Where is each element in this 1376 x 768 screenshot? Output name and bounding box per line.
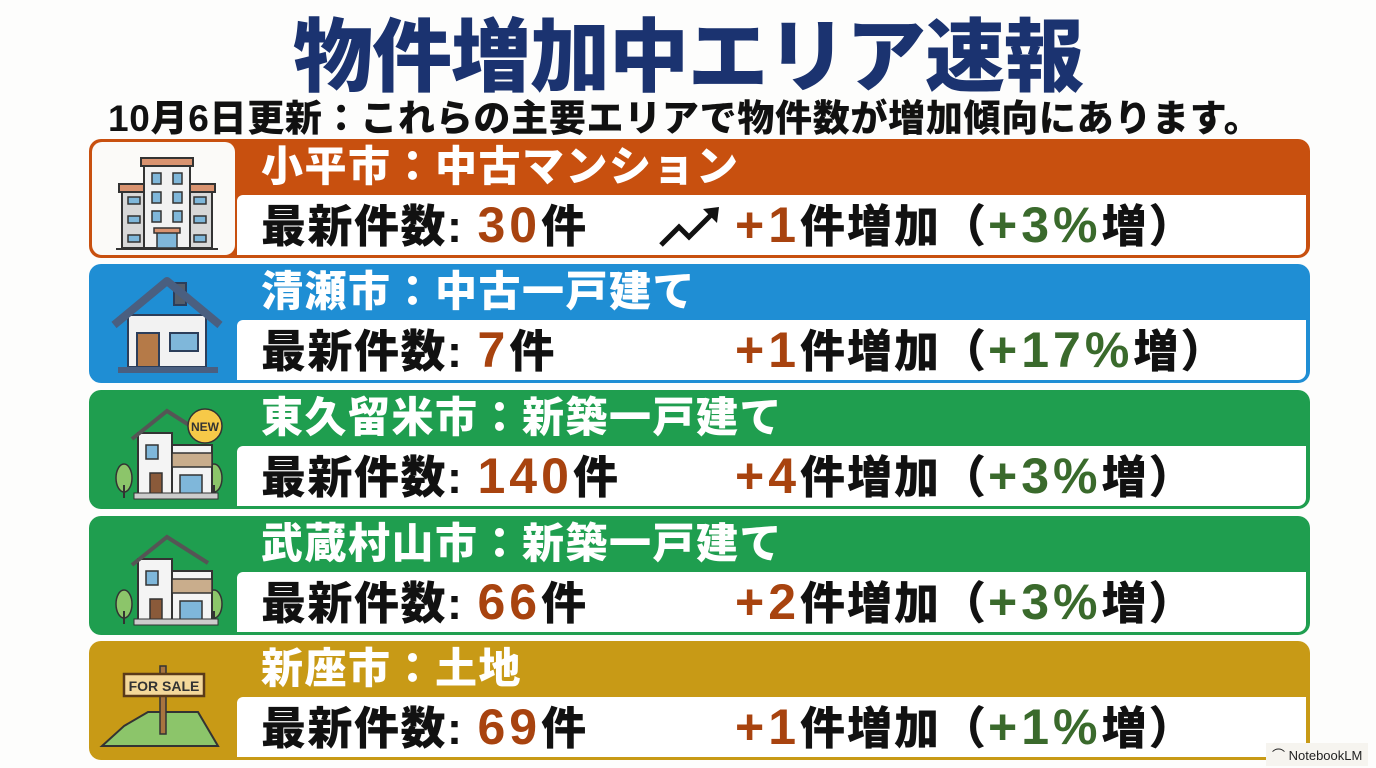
- heading: 小平市：中古マンション: [261, 143, 740, 190]
- panel: Kiyose: [89, 264, 1310, 383]
- heading: 清瀬市：中古一戸建て: [261, 268, 696, 315]
- stats: +1件増加（+17%増）: [735, 322, 1227, 378]
- stats: +1件増加（+3%増）: [735, 197, 1196, 253]
- title: 物件増加中エリア速報: [293, 13, 1083, 102]
- watermark: [1266, 743, 1368, 766]
- panel: Higashikurume: [89, 390, 1310, 509]
- stats: +1件増加（+1%増）: [735, 699, 1196, 755]
- stats: [237, 697, 1306, 757]
- stats: 最新件数: 140件: [261, 448, 619, 504]
- stats: 最新件数: 69件: [261, 699, 588, 755]
- heading: 東久留米市：新築一戸建て: [261, 394, 783, 441]
- panel: Musashimurayama: [89, 516, 1310, 635]
- stats: [237, 446, 1306, 506]
- icon: for sale sign: [100, 665, 220, 747]
- icon: apartment building: [92, 142, 235, 255]
- panel: Kodaira: [89, 139, 1310, 258]
- icon: new house: [115, 408, 223, 500]
- icon: trend arrow: [659, 207, 719, 247]
- panel: Niiza: [89, 641, 1310, 760]
- heading: 武蔵村山市：新築一戸建て: [261, 520, 783, 567]
- stats: [237, 320, 1306, 380]
- stats: [237, 572, 1306, 632]
- icon: for sale sign: FOR SALE: [129, 678, 199, 694]
- stats: 最新件数: 66件: [261, 574, 588, 630]
- stats: +2件増加（+3%増）: [735, 574, 1196, 630]
- subtitle: 10月6日更新：これらの主要エリアで物件数が増加傾向にあります。: [108, 98, 1261, 139]
- stats: [237, 195, 1306, 255]
- icon: house: [112, 277, 222, 373]
- stats: +4件増加（+3%増）: [735, 448, 1196, 504]
- icon: house: [115, 534, 223, 626]
- stats: 最新件数: 7件: [261, 322, 556, 378]
- watermark: ⌒ NotebookLM: [1272, 748, 1362, 763]
- icon: new house: NEW: [191, 420, 220, 434]
- stats: 最新件数: 30件: [261, 197, 588, 253]
- heading: 新座市：土地: [261, 645, 522, 692]
